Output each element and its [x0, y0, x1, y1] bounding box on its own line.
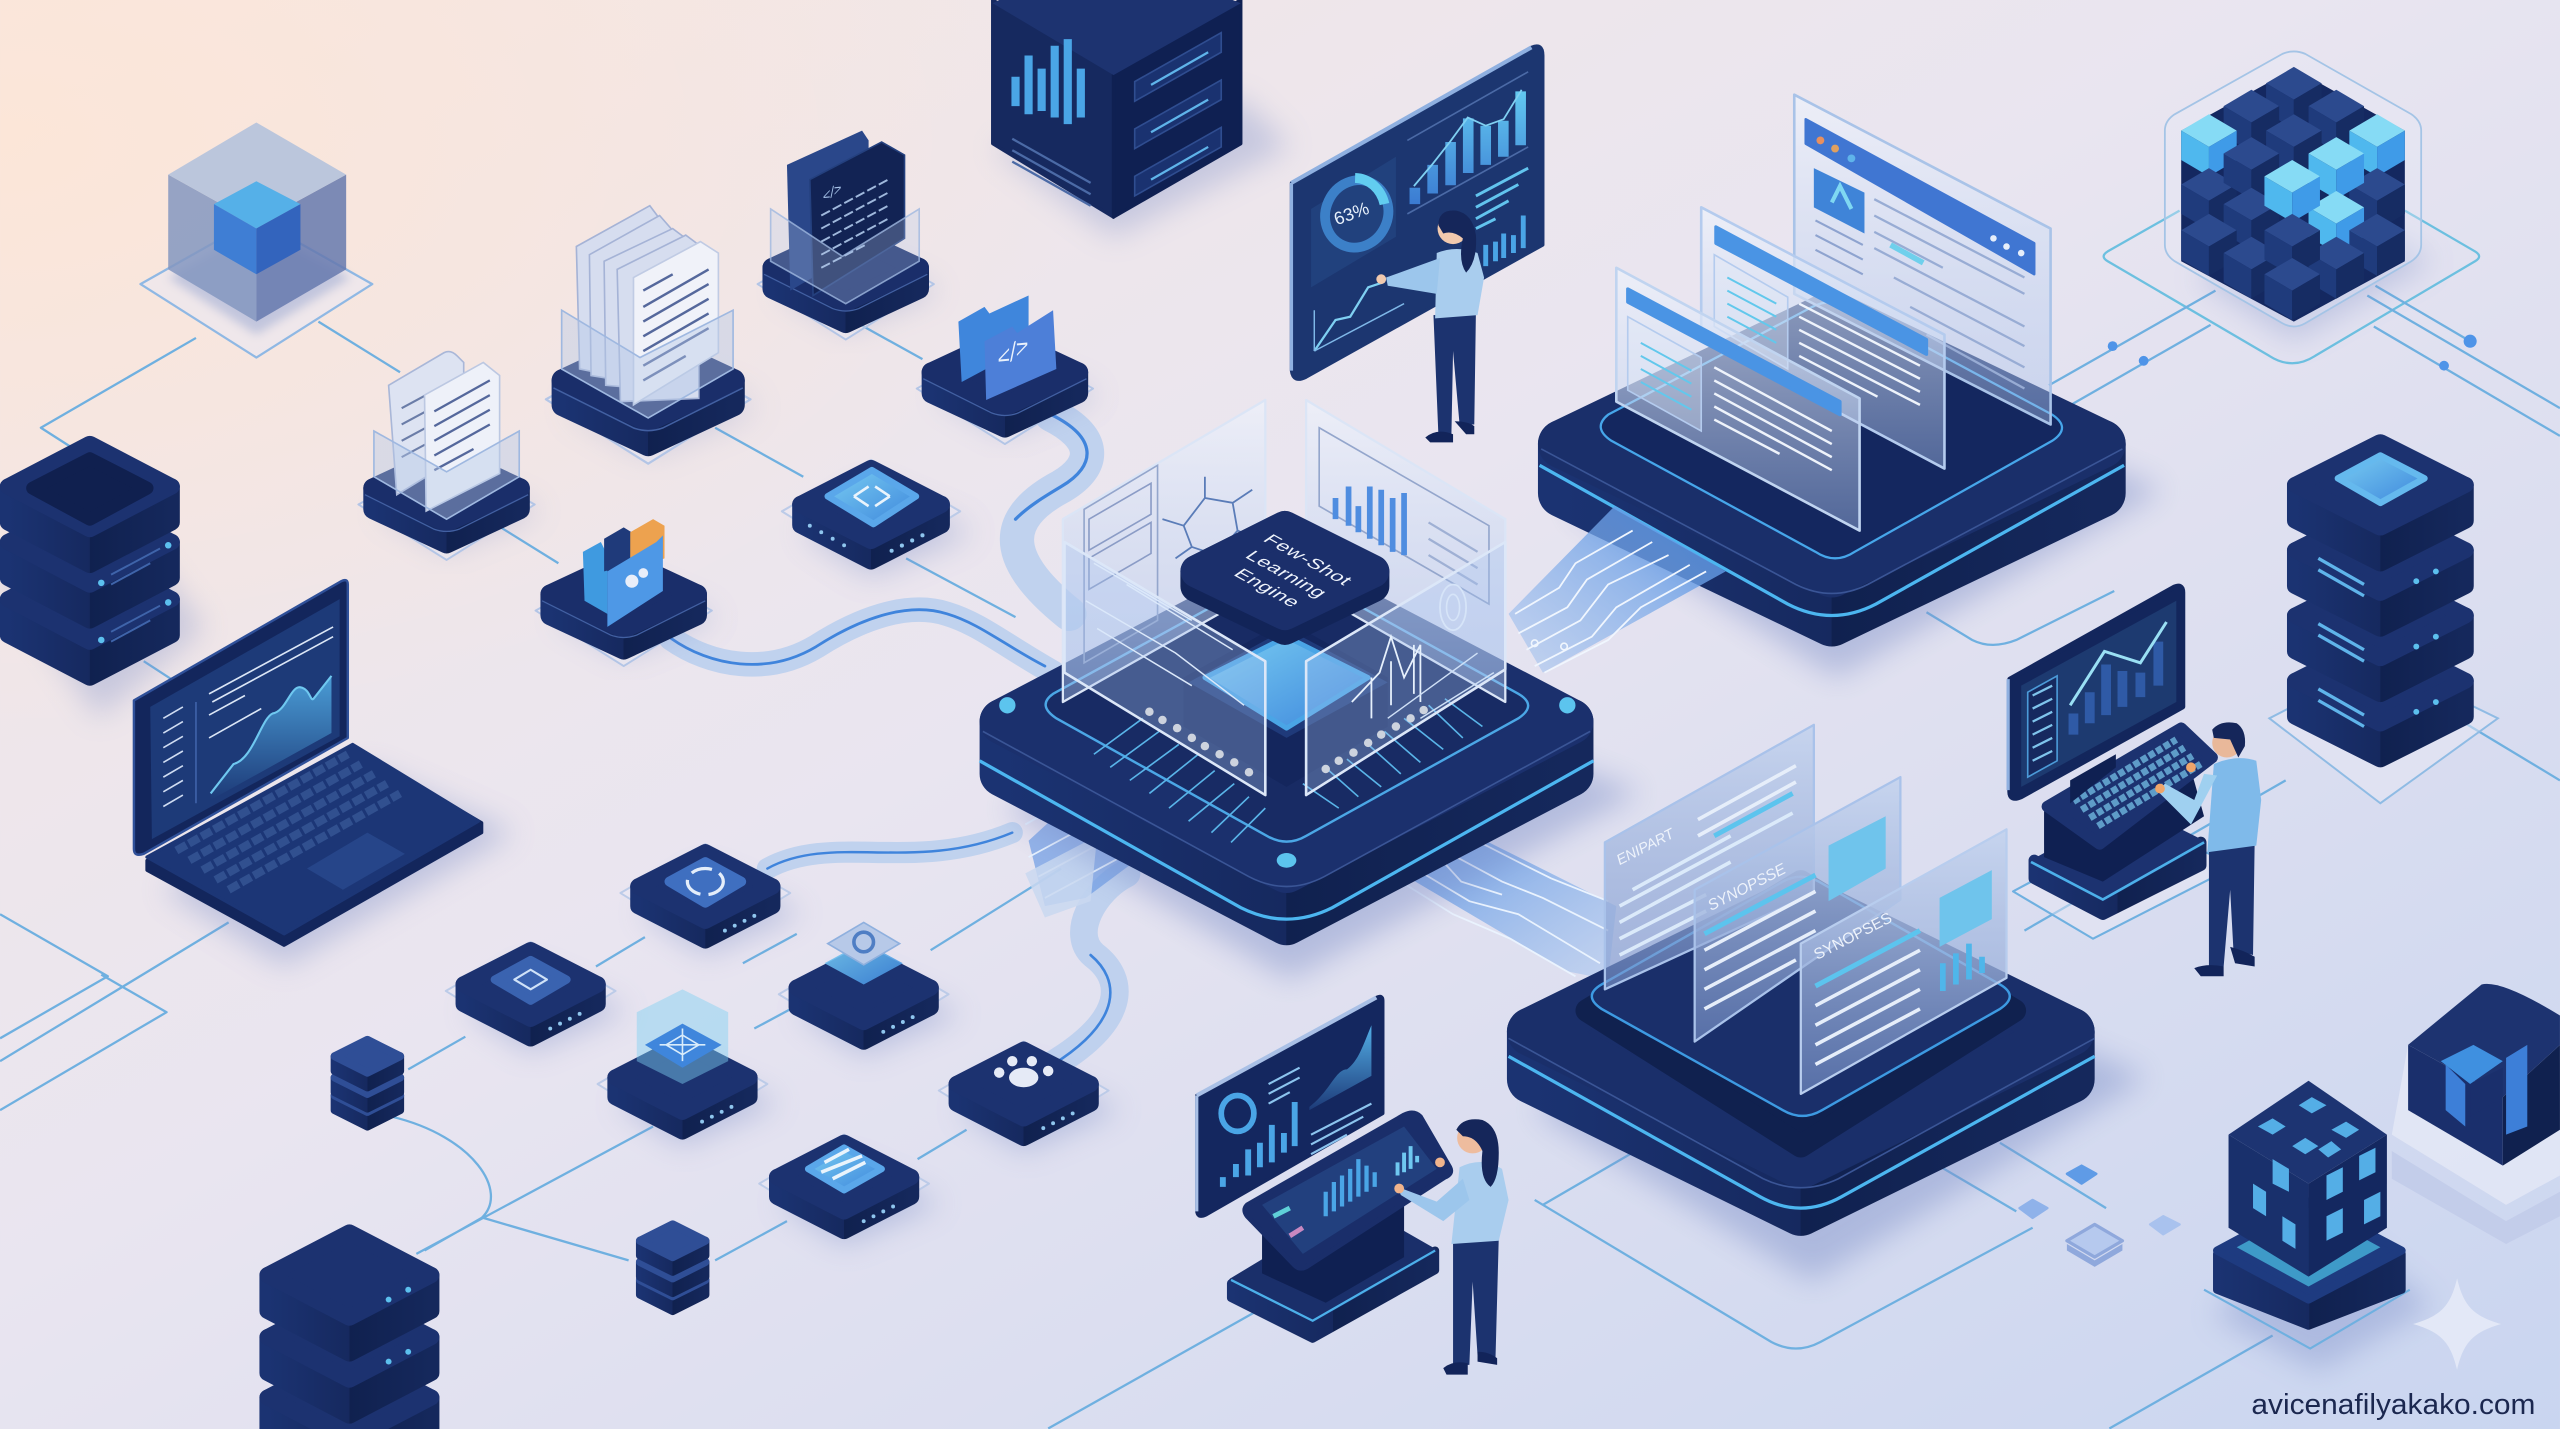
- icon: chip with sync glyph: [620, 844, 803, 955]
- glass panel: back left: [1063, 400, 1265, 702]
- glass page: enipart: [1605, 725, 1814, 989]
- data band: center lower-left: [1025, 795, 1162, 918]
- title: Learning: [1240, 548, 1332, 601]
- icon: bottom-right cube on plate: [2392, 984, 2560, 1244]
- icon: mini server center: [640, 1224, 705, 1311]
- glass page: back: [1794, 95, 2051, 424]
- platform body: [1540, 302, 2124, 622]
- glass page: front: [1616, 268, 1860, 531]
- data band: center to lower-right platform: [1388, 824, 1616, 980]
- data band: center to top-right platform: [1509, 506, 1726, 673]
- keyboard: [176, 754, 400, 890]
- glass page: synopsse: SYNOPSSE: [1705, 860, 1789, 915]
- icon: code documents on base: [758, 131, 940, 340]
- icon: laptop: [134, 580, 514, 966]
- title: [1229, 531, 1357, 611]
- figure: person at workstation: [2155, 722, 2261, 976]
- glass page: synopses: [1801, 829, 2006, 1094]
- flow ribbon: lower-left curve: [767, 833, 1012, 869]
- icon: workstation with monitor: [2008, 586, 2237, 939]
- icon: large documents on base: [546, 206, 758, 464]
- icon: top server cube: [993, 0, 1290, 237]
- icon: right server stack: [2269, 442, 2498, 803]
- figure: person at tablet: [1394, 1119, 1509, 1375]
- icon: chip with gear layer: [779, 922, 962, 1056]
- icon: cube cluster top right: [2165, 51, 2433, 340]
- icon: colour folder chip: [536, 519, 718, 666]
- glass panel: back right: [1306, 400, 1505, 702]
- icon: router chip: [782, 460, 974, 576]
- panel: central engine platform: [980, 400, 1641, 980]
- glass page: enipart: ENIPART: [1614, 826, 1678, 869]
- panel: top-left glass cube: [140, 122, 372, 358]
- icon: chip with paw glyph: [939, 1042, 1122, 1153]
- icon: sparkle watermark: [2413, 1278, 2501, 1370]
- panel: top-right platform with glass pages: [1540, 95, 2163, 678]
- icon: code folder on base: [917, 295, 1100, 444]
- text: website credit: avicenafilyakako.com: [2251, 1389, 2535, 1421]
- glass panel: front left: [1064, 542, 1265, 795]
- center block with engine label: [1197, 527, 1373, 629]
- glass panel: front right: [1306, 542, 1505, 795]
- icon: tablet console: [1231, 1113, 1451, 1339]
- circuit traces: [1094, 699, 1482, 842]
- platform base: [980, 571, 1593, 922]
- laptop screen chart: [163, 627, 333, 806]
- gauge: 63 percent: [1311, 157, 1399, 287]
- icon: bottom-left server stack: [268, 1233, 431, 1429]
- icon: code folder on base: </>: [998, 330, 1028, 375]
- glass page: middle: [1701, 207, 1944, 469]
- title: Few-Shot: [1258, 531, 1357, 589]
- icon: chip with hologram: [598, 989, 780, 1146]
- icon: small documents on base: [358, 352, 541, 560]
- core cap: [1184, 620, 1388, 787]
- flow ribbon: left wave: [671, 610, 1053, 673]
- icon: mini server left: [335, 1040, 400, 1126]
- icon: inner blue cube: [214, 181, 300, 274]
- panel: lower-right platform with synopsis pages: [1509, 725, 2147, 1282]
- title: Engine: [1229, 566, 1305, 611]
- icon: chip with screen glyph: [446, 942, 629, 1053]
- gauge: 63 percent: 63%: [1331, 198, 1372, 229]
- icon: code documents on base: </>: [823, 180, 841, 206]
- icon: left server stack: [0, 444, 204, 718]
- icon: server cube with tiles: [2204, 1081, 2433, 1371]
- platform body: [1509, 877, 2095, 1211]
- icon: floating data tiles: [2020, 1166, 2180, 1267]
- icon: chip with dashboard glyph: [759, 1135, 942, 1246]
- glass page: synopsse: [1695, 777, 1900, 1042]
- network glyph: [1162, 477, 1257, 575]
- chart: top dashboard panel: [1291, 46, 1543, 379]
- flow ribbon: top S curve: [1016, 415, 1087, 614]
- chart: lower dashboard panel: [1197, 996, 1383, 1216]
- server chart: [1012, 39, 1091, 206]
- glass page: synopses: SYNOPSES: [1811, 910, 1895, 964]
- figure: person at dashboard: [1376, 210, 1484, 442]
- flow ribbon: lower curve: [1053, 873, 1127, 1064]
